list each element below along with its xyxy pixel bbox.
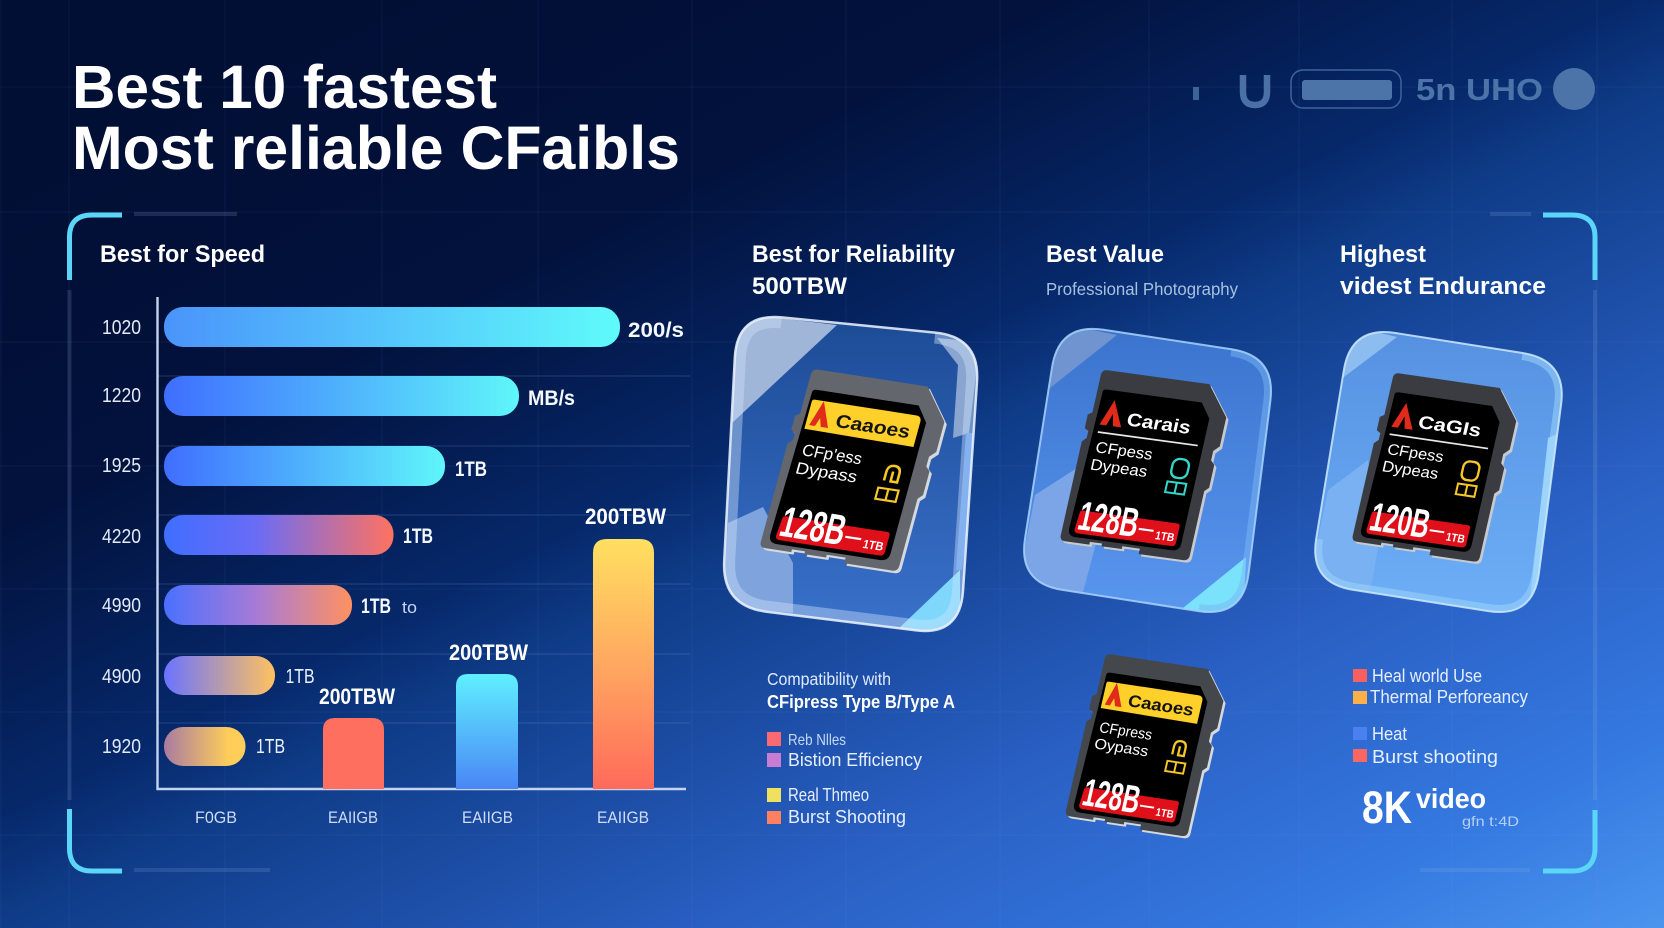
logo strip <box>1193 68 1595 110</box>
sd card 2: CFpess <box>1094 439 1154 464</box>
x axis labels: F0GB <box>195 808 237 827</box>
bar value labels: MB/s <box>528 387 575 410</box>
bar value labels: 1TB <box>403 525 433 548</box>
bar value labels: 200TBW <box>585 504 666 529</box>
legend: reliability <box>767 732 922 827</box>
logo strip: 5n UHO <box>1416 72 1543 107</box>
sd card 2: Dypeas <box>1089 457 1149 481</box>
y axis labels: 4900 <box>102 666 141 688</box>
sd card 4: Caaoes <box>1126 691 1196 720</box>
column: highest endurance heading: videst Endurance <box>1340 273 1546 300</box>
horizontal bars <box>164 307 620 766</box>
column: best value heading <box>1046 241 1238 299</box>
column: best for reliability heading: 500TBW <box>752 273 847 300</box>
x axis labels <box>195 808 649 827</box>
compatibility text: CFipress Type B/Type A <box>767 691 955 712</box>
y axis labels <box>102 317 141 758</box>
speed and endurance chart <box>102 297 690 827</box>
legend: endurance: Heat <box>1372 724 1407 744</box>
sd card 4: 128B <box>1079 772 1144 822</box>
compatibility text: Compatibility with <box>767 669 891 689</box>
column: highest endurance heading <box>1340 241 1546 300</box>
sd card 3: 120B <box>1366 493 1435 547</box>
bar value labels: to <box>402 598 417 617</box>
compatibility text <box>767 669 955 712</box>
sd card 1 <box>758 368 956 575</box>
bar value labels <box>256 319 684 758</box>
sd card 1: 128B <box>775 498 852 555</box>
x axis labels: EAIIGB <box>328 808 378 827</box>
bar value labels: 1TB <box>361 595 391 618</box>
sd card 2: Carais <box>1125 409 1193 438</box>
panel frame brackets <box>70 214 1595 871</box>
legend: reliability: Bistion Efficiency <box>788 750 922 770</box>
sd card 2: 128B <box>1074 493 1144 546</box>
column: best value heading: Professional Photography <box>1046 279 1238 299</box>
title: Best 10 fastest <box>72 53 497 121</box>
8k video callout: gfn t:4D <box>1462 813 1519 829</box>
sd card 4: Oypass <box>1093 736 1150 760</box>
column: highest endurance heading: Highest <box>1340 241 1426 268</box>
sd card 2 <box>1059 369 1236 564</box>
sd card 3: 1TB <box>1445 531 1466 546</box>
y axis labels: 1020 <box>102 317 141 339</box>
x axis labels: EAIIGB <box>597 808 649 827</box>
title: Most reliable CFaibls <box>72 114 680 182</box>
glass panel 3 <box>1314 331 1563 613</box>
legend: reliability: Real Thmeo <box>788 785 869 805</box>
sd card 3: CaGIs <box>1416 412 1483 441</box>
vertical bars <box>323 539 654 789</box>
bar value labels: 200TBW <box>449 640 528 665</box>
sd card 1: Caaoes <box>833 411 912 443</box>
y axis labels: 1220 <box>102 385 141 407</box>
legend: reliability: Burst Shooting <box>788 807 906 827</box>
heading: best for speed: Best for Speed <box>100 241 265 268</box>
legend: endurance: Burst shooting <box>1372 747 1498 767</box>
x axis labels: EAIIGB <box>462 808 513 827</box>
sd card 4 <box>1064 653 1233 840</box>
legend: endurance <box>1353 666 1528 767</box>
sd card 2: 1TB <box>1154 529 1176 544</box>
sd card 4: CFpress <box>1098 719 1154 744</box>
legend: reliability: Reb Nlles <box>788 732 846 749</box>
y axis labels: 1920 <box>102 736 141 758</box>
bar value labels: 1TB <box>455 458 487 481</box>
sd card 3: CFpess <box>1386 441 1445 466</box>
8k video callout: 8K <box>1362 782 1412 833</box>
title <box>72 53 680 182</box>
y axis labels: 1925 <box>102 455 141 477</box>
sd card 1: Dypass <box>794 459 859 486</box>
bar value labels: 200TBW <box>319 684 395 709</box>
column: best for reliability heading: Best for Reliability <box>752 241 956 268</box>
y axis labels: 4220 <box>102 526 141 548</box>
sd card 4: 1TB <box>1154 807 1175 821</box>
y axis labels: 4990 <box>102 595 141 617</box>
bar value labels: 1TB <box>286 666 314 688</box>
legend: endurance: Heal world Use <box>1372 666 1482 686</box>
column: best value heading: Best Value <box>1046 241 1164 268</box>
bar value labels: 200/s <box>628 319 684 342</box>
8k video callout: video <box>1416 783 1486 814</box>
sd card 1: CFp'ess <box>800 441 864 468</box>
glass panel 2 <box>1023 328 1272 613</box>
sd card 1: 1TB <box>861 537 885 554</box>
8k video callout <box>1362 782 1519 833</box>
column: best for reliability heading <box>752 241 956 300</box>
sd card 3: Dypeas <box>1380 458 1440 483</box>
glass panel 1 <box>722 316 978 632</box>
legend: endurance: Thermal Perforeancy <box>1370 687 1528 707</box>
bar value labels: 1TB <box>256 736 285 758</box>
sd card 3 <box>1351 372 1526 565</box>
